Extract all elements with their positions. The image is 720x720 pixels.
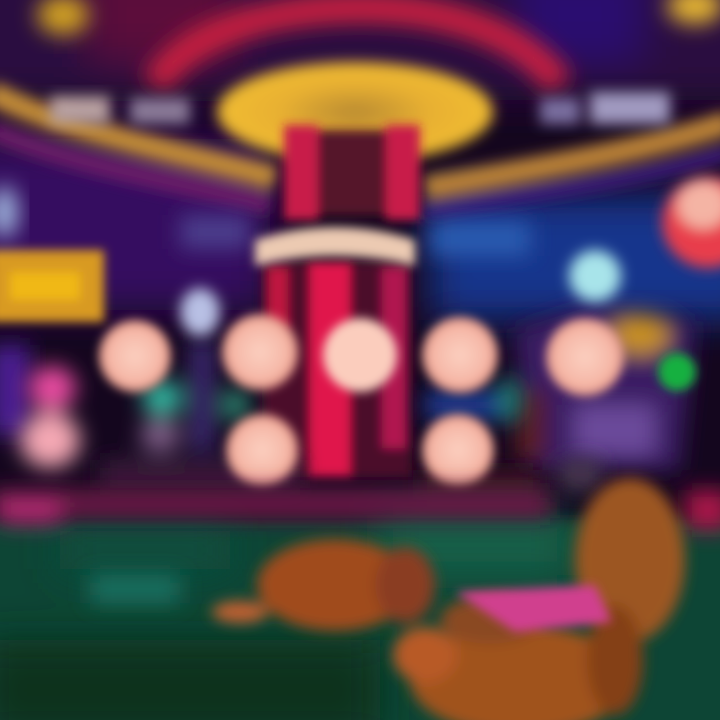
cream pillar band bbox=[255, 227, 415, 266]
green light bbox=[658, 353, 696, 391]
pink floor edge bbox=[0, 490, 720, 603]
right red globe bbox=[662, 176, 720, 268]
lavender light bbox=[180, 288, 220, 336]
pink dog blanket bbox=[455, 585, 612, 632]
green felt floor bbox=[0, 520, 720, 720]
left yellow sign bbox=[0, 250, 104, 322]
brown dog bbox=[212, 478, 685, 720]
upper red pillars bbox=[284, 125, 420, 220]
wall and ceiling colour bbox=[0, 0, 720, 320]
ceiling red arc bbox=[155, 8, 560, 85]
peach round lights bbox=[99, 314, 624, 486]
pale blue lamp bbox=[569, 250, 621, 302]
golden central dome bbox=[217, 62, 493, 162]
blurred sign right bbox=[540, 92, 670, 124]
right machine cluster bbox=[515, 306, 695, 470]
left purple wall bbox=[0, 345, 30, 435]
golden curved balcony bands bbox=[0, 92, 720, 212]
pink slot machine bbox=[20, 366, 80, 468]
floor shading bbox=[0, 515, 570, 720]
lower red striped pillars bbox=[262, 262, 412, 477]
ceiling lights bbox=[37, 0, 720, 35]
blurred sign left bbox=[50, 96, 190, 124]
left pale globe bbox=[0, 186, 18, 238]
blue and violet wall signs bbox=[180, 215, 530, 256]
machine row colour smudges bbox=[100, 340, 600, 500]
